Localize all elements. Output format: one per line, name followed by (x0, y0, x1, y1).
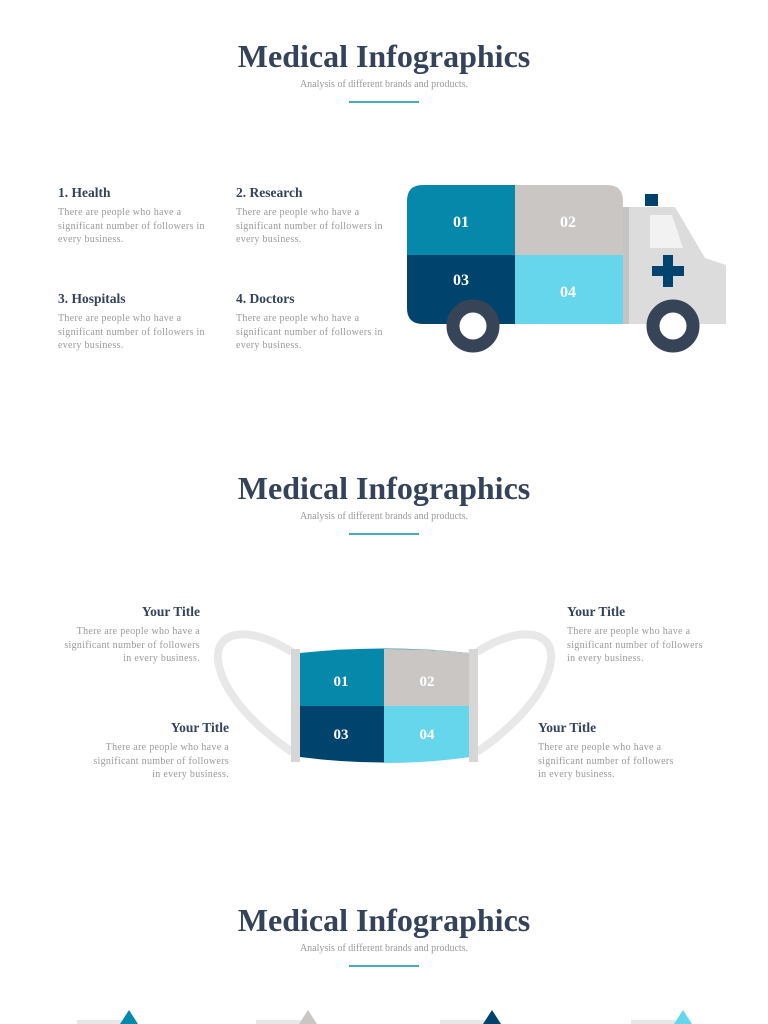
underline 1 (349, 101, 419, 103)
text: top right (567, 604, 703, 664)
mask illustration: 03 (334, 727, 348, 743)
item: research (236, 185, 383, 245)
ambulance illustration: 04 (560, 284, 576, 301)
item: doctors (236, 291, 383, 351)
title 2: Medical Infographics (238, 470, 530, 506)
item: research: 2. Research (236, 185, 302, 200)
mask illustration: 02 (420, 674, 434, 690)
item: health: There are people who have a significant number of followers in every business. (58, 207, 205, 245)
text: bottom left: There are people who have a significant number of followers in every business. (93, 742, 229, 780)
item: hospitals (58, 291, 205, 351)
item: doctors: There are people who have a significant number of followers in every business. (236, 313, 383, 351)
mask illustration (214, 630, 555, 763)
text: top left (64, 604, 200, 664)
text: bottom right (538, 720, 674, 780)
text: bottom left: Your Title (171, 720, 229, 735)
ambulance illustration: 02 (560, 214, 576, 231)
subtitle 3: Analysis of different brands and products. (300, 943, 468, 954)
title 1: Medical Infographics (238, 38, 530, 74)
underline 3 (349, 965, 419, 967)
text: top right: There are people who have a significant number of followers in every business. (567, 626, 703, 664)
item: doctors: 4. Doctors (236, 291, 294, 306)
underline 2 (349, 533, 419, 535)
ambulance illustration: 03 (453, 272, 469, 289)
text: top left: There are people who have a significant number of followers in every business. (64, 626, 200, 664)
ambulance illustration (407, 185, 726, 352)
item: health: 1. Health (58, 185, 110, 200)
text: top right: Your Title (567, 604, 625, 619)
subtitle 2: Analysis of different brands and products. (300, 511, 468, 522)
mask illustration: 01 (334, 674, 348, 690)
text: bottom right: Your Title (538, 720, 596, 735)
text: bottom right: There are people who have a significant number of followers in every business. (538, 742, 674, 780)
item: research: There are people who have a significant number of followers in every business. (236, 207, 383, 245)
text: top left: Your Title (142, 604, 200, 619)
text: bottom left (93, 720, 229, 780)
item: hospitals: There are people who have a significant number of followers in every business. (58, 313, 205, 351)
item: hospitals: 3. Hospitals (58, 291, 126, 306)
item: health (58, 185, 205, 245)
title 3: Medical Infographics (238, 902, 530, 938)
subtitle 1: Analysis of different brands and products. (300, 79, 468, 90)
mask illustration: 04 (420, 727, 435, 743)
ambulance illustration: 01 (453, 214, 469, 231)
bottom markers (77, 1010, 692, 1024)
